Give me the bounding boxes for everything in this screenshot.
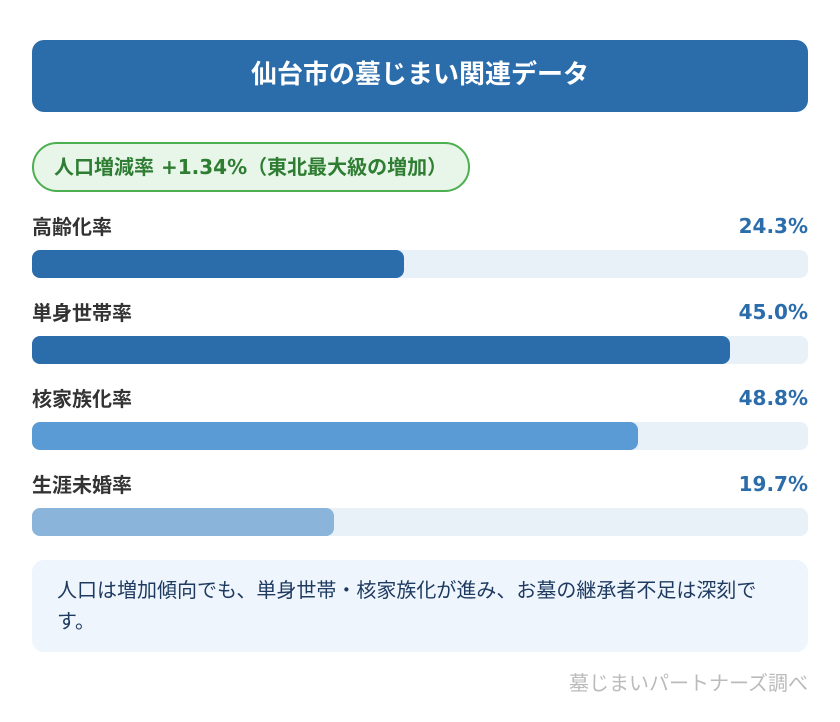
label: lifetime unmarried rate: 生涯未婚率	[32, 473, 132, 497]
title banner: 仙台市の墓じまい関連データ	[251, 60, 589, 90]
note panel: 人口は増加傾向でも、単身世帯・核家族化が進み、お墓の継承者不足は深刻です。	[57, 578, 756, 633]
label: nuclear family rate: 核家族化率	[32, 387, 132, 411]
label: single household rate: 単身世帯率	[32, 301, 132, 325]
value: nuclear family rate: 48.8%	[739, 386, 808, 410]
value: aging rate: 24.3%	[739, 214, 808, 238]
bar: single household rate	[32, 336, 808, 364]
value: single household rate: 45.0%	[739, 300, 808, 324]
bar: aging rate	[32, 250, 808, 278]
value: lifetime unmarried rate: 19.7%	[739, 472, 808, 496]
badge: population change	[32, 142, 470, 192]
bar: nuclear family rate	[32, 422, 808, 450]
badge: population change: 人口増減率 +1.34%（東北最大級の増加）	[54, 155, 447, 179]
source credit: 墓じまいパートナーズ調べ	[569, 671, 808, 695]
label: aging rate: 高齢化率	[32, 215, 112, 239]
title banner	[32, 40, 808, 112]
note panel	[32, 560, 808, 652]
bar: lifetime unmarried rate	[32, 508, 808, 536]
